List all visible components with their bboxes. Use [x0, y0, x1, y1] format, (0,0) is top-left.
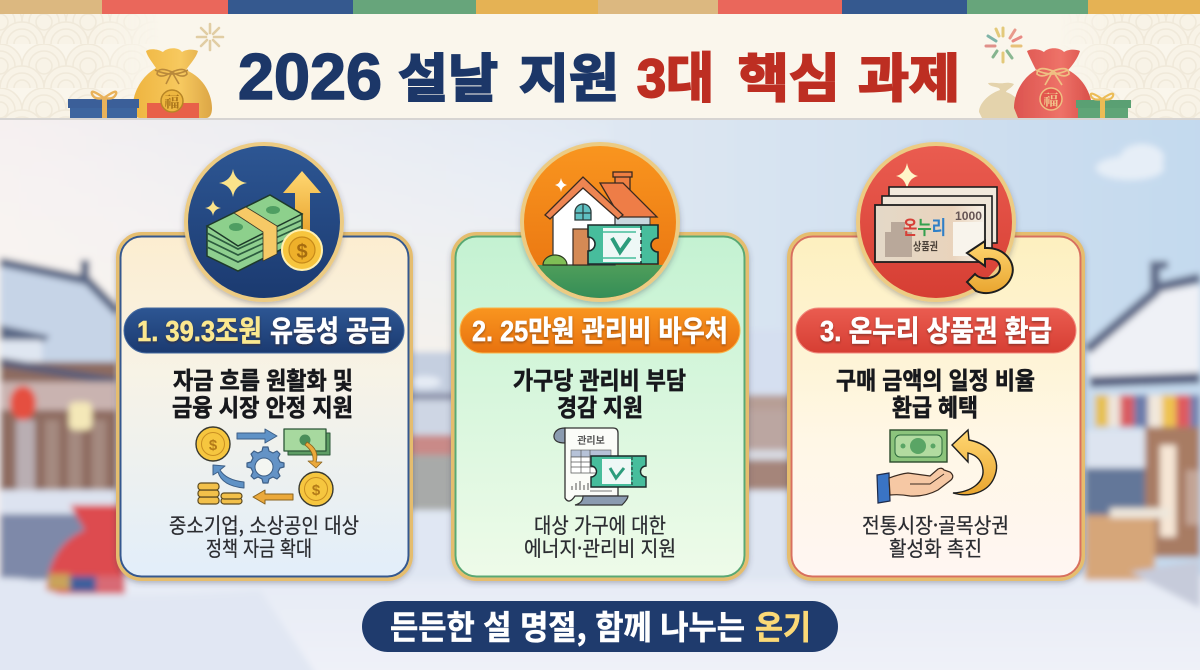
pill heading: 39.3 trillion won: 1. 39.3조원: [137, 315, 262, 348]
title: 과제: [858, 37, 960, 112]
pill heading: 39.3 trillion won: 유동성 공급: [270, 308, 392, 350]
left building shapes: [0, 262, 118, 378]
gap between cards 1 and 2: [405, 352, 460, 397]
icon: money circulation: $: [312, 482, 321, 499]
heading text: 자금 흐름 원활화 및: [173, 361, 353, 396]
icon: money stack badge: $: [296, 241, 308, 263]
icon: house and voucher badge: [520, 142, 680, 305]
snow ground: [0, 575, 1200, 670]
right building shapes: [1087, 285, 1200, 382]
description text: 활성화 촉진: [889, 533, 982, 563]
icon: right red lucky bag, tan bag and green gift: 福: [1043, 89, 1059, 110]
description text: 대상 가구에 대한: [534, 510, 666, 540]
icon: onnuri gift certificate badge: 1000: [955, 211, 982, 223]
heading text: 환급 혜택: [892, 388, 978, 423]
icon: onnuri gift certificate badge: 상품권: [913, 238, 938, 254]
description text: [524, 510, 676, 563]
icon: bill with voucher: [554, 428, 646, 505]
icon: left firework: [197, 24, 223, 50]
title: 지원: [519, 37, 619, 112]
icon: money stack badge: [184, 142, 344, 302]
pill heading: onnuri certificate refund: [796, 308, 1076, 353]
heading text: 가구당 관리비 부담: [513, 361, 686, 396]
footer slogan pill: 든든한 설 명절, 함께 나누는: [390, 601, 745, 649]
heading text: [513, 361, 686, 423]
pill heading: 250,000 won voucher: 2. 25만원 관리비 바우처: [472, 315, 728, 348]
description text: 전통시장·골목상권: [862, 510, 1009, 540]
pill heading: 39.3 trillion won: [124, 308, 404, 353]
icon: onnuri gift certificate badge: 온누리: [903, 213, 946, 240]
icon: onnuri gift certificate badge: [856, 142, 1016, 302]
description text: 에너지·관리비 지원: [524, 533, 676, 563]
gap between cards 2 and 3: [740, 330, 795, 395]
description text: 정책 자금 확대: [206, 533, 312, 563]
pill heading: 250,000 won voucher: [460, 308, 740, 353]
heading text: 경감 지원: [557, 388, 643, 423]
title: 핵심: [738, 37, 840, 112]
card body: [788, 234, 1084, 580]
icon: right firework: [986, 28, 1021, 62]
heading text: 구매 금액의 일정 비율: [836, 361, 1035, 396]
icon: left gold lucky bag and blue gift: [68, 48, 212, 118]
icon: hand receiving cash back: [877, 430, 996, 503]
description text: [862, 510, 1009, 563]
title: 2026: [238, 40, 382, 113]
icon: left gold lucky bag and blue gift: 福: [164, 91, 180, 112]
header banner: [0, 14, 1200, 120]
description text: [169, 510, 359, 563]
title: 3대: [637, 49, 714, 109]
card body: [118, 234, 412, 580]
heading text: [172, 361, 353, 423]
icon: money circulation: $: [209, 437, 218, 454]
title: [238, 37, 960, 113]
panel: liquidity supply: [118, 142, 412, 580]
panel: management fee voucher: [452, 142, 748, 580]
footer slogan pill: 온기: [755, 601, 811, 649]
heading text: 금융 시장 안정 지원: [172, 388, 353, 423]
icon: bill with voucher: 관리보: [577, 432, 605, 447]
panel: onnuri voucher refund: [788, 142, 1084, 580]
description text: 중소기업, 소상공인 대상: [169, 510, 359, 540]
heading text: [836, 361, 1035, 423]
card body: [452, 234, 748, 580]
pill heading: onnuri certificate refund: 3. 온누리 상품권 환급: [820, 315, 1052, 348]
icon: money circulation: [196, 427, 333, 506]
top colour stripe: [0, 0, 1200, 14]
icon: right red lucky bag, tan bag and green gift: [979, 48, 1131, 118]
title: 설날: [398, 37, 498, 112]
